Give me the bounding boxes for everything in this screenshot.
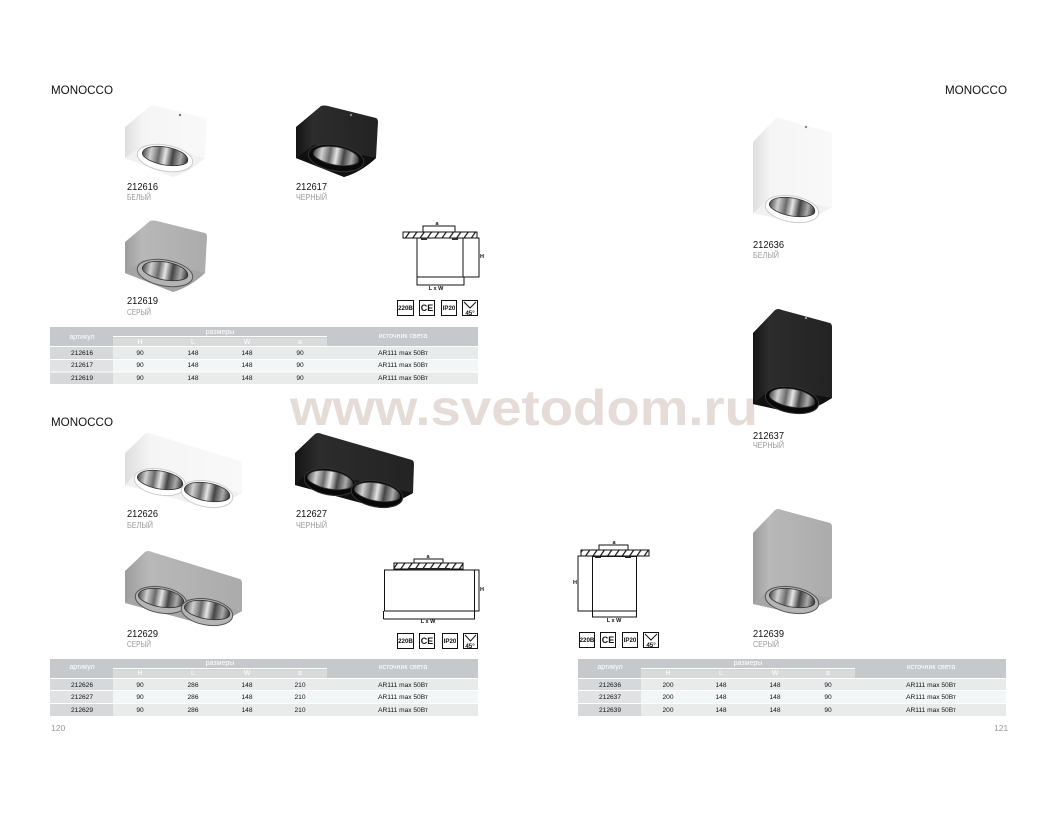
product: 212616 white: [125, 106, 207, 202]
table: 21261x: 90: [136, 362, 144, 369]
table: 21261x: 148: [241, 350, 253, 357]
table: 21261x: H: [137, 339, 143, 346]
product: 212639 grey tall: 212639: [753, 628, 784, 640]
icons: certification row 2: IP20: [444, 638, 457, 645]
table: 21262x: 148: [241, 682, 253, 689]
table: 21262x: размеры: [206, 660, 234, 667]
table: 21263x: 90: [824, 682, 832, 689]
table: 21263x: 200: [662, 707, 674, 714]
table: 21263x: 90: [824, 694, 832, 701]
product: 212626 white double: БЕЛЫЙ: [127, 521, 153, 530]
table: 21263x: AR111 max 50Вт: [906, 682, 956, 689]
product: 212636 white tall: БЕЛЫЙ: [753, 251, 779, 260]
table: 21263x: 212636: [599, 682, 621, 689]
icons: certification row 1: 220В: [398, 305, 413, 312]
icons: certification row 2: 220В: [398, 638, 413, 645]
product: 212627 black double: ЧЕРНЫЙ: [296, 521, 327, 530]
table: 21263x: 90: [824, 707, 832, 714]
table: 21261x: 90: [296, 362, 304, 369]
table: 21263x: 148: [715, 694, 727, 701]
table: 21263x: артикул: [597, 664, 623, 671]
table: 21261x: 148: [187, 350, 199, 357]
dimension drawing: double lamp: H: [480, 587, 484, 593]
icons: certification row 3: 220В: [580, 637, 595, 644]
table: 21262x: 90: [136, 682, 144, 689]
dimension drawing: tall lamp: a: [612, 540, 616, 546]
dimension drawing: double lamp: a: [426, 554, 430, 560]
icons: certification row 3: 45°: [646, 642, 656, 649]
table: 21261x: a: [298, 339, 302, 346]
dimension drawing: double lamp: [384, 554, 484, 625]
product: 212619 grey: 212619: [127, 295, 158, 307]
table: 21261x: AR111 max 50Вт: [378, 362, 428, 369]
table: 21261x: артикул: [69, 334, 95, 341]
table: 21261x: 148: [241, 362, 253, 369]
watermark: www.svetodom.ru: [289, 380, 758, 436]
table: 21262x: 212629: [71, 707, 93, 714]
table: 21261x: W: [244, 339, 251, 346]
table: 21263x: 148: [715, 682, 727, 689]
dimension drawing: single lamp: L x W: [429, 286, 444, 292]
product: 212627 black double: 212627: [296, 508, 327, 520]
page number right: 121: [994, 723, 1008, 733]
product: 212617 black: [296, 106, 378, 202]
table: 21263x: 148: [715, 707, 727, 714]
table: 21263x: источник света: [907, 664, 955, 671]
table: 21262x: AR111 max 50Вт: [378, 682, 428, 689]
product: 212637 black tall: 212637: [753, 430, 784, 442]
title: left page bottom: MONOCCO: [51, 417, 113, 429]
table: 21261x: размеры: [206, 329, 234, 336]
icons: certification row 1: CE: [421, 303, 433, 313]
table: 21263x: 212637: [599, 694, 621, 701]
product: 212619 grey: СЕРЫЙ: [127, 308, 151, 317]
product: 212636 white tall: 212636: [753, 239, 784, 251]
table: 21263x: 148: [769, 694, 781, 701]
table: 21262x: 210: [294, 682, 306, 689]
table: 21263x: размеры: [734, 660, 762, 667]
icons: certification row 3: CE: [602, 635, 614, 645]
table: 21262x: 90: [136, 707, 144, 714]
table: 21261x: источник света: [379, 333, 427, 340]
table: 21262x: 286: [187, 707, 199, 714]
icons: certification row 1: 45°: [465, 310, 475, 317]
dimension drawing: tall lamp: [573, 540, 649, 624]
table: 21262x: 90: [136, 694, 144, 701]
dimension drawing: tall lamp: L x W: [607, 618, 622, 624]
table: 21263x: 200: [662, 682, 674, 689]
table: 21263x: 212639: [599, 707, 621, 714]
product: 212629 grey double: 212629: [127, 628, 158, 640]
table: 21263x: AR111 max 50Вт: [906, 707, 956, 714]
table: 21263x: L: [719, 670, 723, 677]
product: 212629 grey double: СЕРЫЙ: [127, 640, 151, 649]
dimension drawing: double lamp: L x W: [421, 619, 436, 625]
product: 212619 grey: [125, 220, 207, 317]
table: 21261x: 90: [296, 375, 304, 382]
icons: certification row 2: [398, 634, 478, 650]
table: 21261x: 90: [136, 375, 144, 382]
product: 212639 grey tall: [753, 509, 832, 649]
table: 21261x: 148: [187, 375, 199, 382]
dimension drawing: single lamp: H: [480, 254, 484, 260]
table: 21262x: 148: [241, 694, 253, 701]
table: 21262x: [50, 659, 478, 716]
table: 21262x: AR111 max 50Вт: [378, 694, 428, 701]
page number left: 120: [51, 723, 65, 733]
dimension drawing: single lamp: [403, 221, 484, 292]
table: 21263x: AR111 max 50Вт: [906, 694, 956, 701]
table: 21262x: H: [137, 670, 143, 677]
table: 21263x: a: [826, 670, 830, 677]
icons: certification row 1: IP20: [443, 305, 456, 312]
product: 212617 black: 212617: [296, 181, 327, 193]
icons: certification row 3: IP20: [624, 637, 637, 644]
table: 21263x: 200: [662, 694, 674, 701]
table: 21262x: источник света: [379, 664, 427, 671]
table: 21261x: AR111 max 50Вт: [378, 375, 428, 382]
table: 21262x: L: [191, 670, 195, 677]
table: 21262x: 148: [241, 707, 253, 714]
product: 212639 grey tall: СЕРЫЙ: [753, 640, 779, 649]
icons: certification row 2: 45°: [465, 643, 475, 650]
title: left page top: MONOCCO: [51, 85, 113, 97]
table: 21261x: 212617: [71, 362, 93, 369]
dimension drawing: single lamp: a: [435, 221, 439, 227]
table: 21263x: 148: [769, 682, 781, 689]
product: 212627 black double: [295, 433, 414, 530]
table: 21262x: 212627: [71, 694, 93, 701]
title: right page: MONOCCO: [945, 85, 1007, 97]
table: 21262x: 212626: [71, 682, 93, 689]
product: 212637 black tall: [753, 309, 832, 450]
table: 21262x: 210: [294, 694, 306, 701]
table: 21263x: [578, 659, 1006, 716]
table: 21261x: L: [191, 339, 195, 346]
table: 21262x: 286: [187, 682, 199, 689]
table: 21261x: 148: [187, 362, 199, 369]
icons: certification row 2: CE: [421, 636, 433, 646]
product: 212617 black: ЧЕРНЫЙ: [296, 193, 327, 202]
product: 212626 white double: 212626: [127, 508, 158, 520]
table: 21262x: артикул: [69, 664, 95, 671]
table: 21263x: H: [665, 670, 671, 677]
table: 21261x: 90: [136, 350, 144, 357]
table: 21261x: 148: [241, 375, 253, 382]
table: 21262x: W: [244, 670, 251, 677]
icons: certification row 3: [580, 632, 658, 649]
table: 21261x: AR111 max 50Вт: [378, 350, 428, 357]
table: 21262x: 210: [294, 707, 306, 714]
table: 21262x: 286: [187, 694, 199, 701]
table: 21261x: [50, 327, 478, 384]
product: 212616 white: 212616: [127, 181, 158, 193]
table: 21261x: 90: [296, 350, 304, 357]
table: 21261x: 212619: [71, 375, 93, 382]
product: 212636 white tall: [753, 118, 832, 260]
product: 212616 white: БЕЛЫЙ: [127, 193, 151, 202]
product: 212637 black tall: ЧЕРНЫЙ: [753, 441, 784, 450]
table: 21263x: W: [772, 670, 779, 677]
icons: certification row 1: [398, 300, 478, 317]
product: 212629 grey double: [125, 551, 242, 649]
product: 212626 white double: [125, 433, 242, 530]
dimension drawing: tall lamp: H: [573, 580, 577, 586]
table: 21262x: a: [298, 670, 302, 677]
table: 21263x: 148: [769, 707, 781, 714]
table: 21262x: AR111 max 50Вт: [378, 707, 428, 714]
table: 21261x: 212616: [71, 350, 93, 357]
